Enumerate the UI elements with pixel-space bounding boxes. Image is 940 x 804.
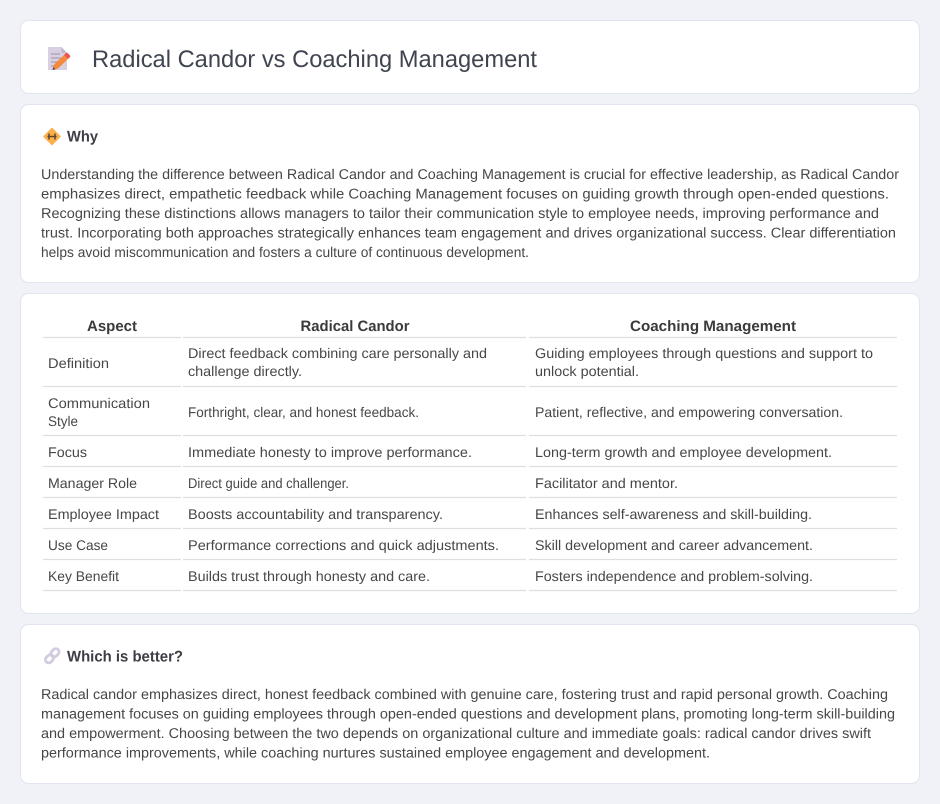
panel: why <box>20 104 920 282</box>
row: key benefit: Key Benefit <box>48 568 119 584</box>
row: manager role: Manager Role <box>48 475 137 491</box>
row: definition: Direct feedback combining care personally and <box>188 345 487 361</box>
row: focus: Immediate honesty to improve performance. <box>188 444 472 460</box>
icon: warning diamond <box>44 128 60 144</box>
row: communication style: Style <box>48 413 78 429</box>
row: employee impact: Employee Impact <box>48 506 159 522</box>
row: employee impact: Enhances self-awareness and skill-building. <box>535 506 812 522</box>
panel: title header <box>20 20 920 94</box>
table header <box>87 318 796 335</box>
row: use case <box>48 537 813 553</box>
table header: Coaching Management <box>630 318 796 335</box>
text block: which is better paragraph: and empowerment. Choosing between the two depends on organizational culture and immediate goals: radical candor drives swift <box>41 726 871 742</box>
text block: which is better paragraph: management focuses on guiding employees through open-ended questions and development plans, promoting long-term skill-building <box>41 706 895 722</box>
text block: why paragraph: Understanding the difference between Radical Candor and Coaching Management is crucial for effective leadership, as Radical Candor <box>41 167 899 183</box>
table header: Radical Candor <box>300 318 410 335</box>
panel: comparison table <box>20 294 920 614</box>
row: focus: Long-term growth and employee development. <box>535 444 832 460</box>
table header: Aspect <box>87 318 137 335</box>
row: definition: Guiding employees through questions and support to <box>535 345 873 361</box>
row: focus <box>48 444 832 460</box>
row: key benefit: Builds trust through honesty and care. <box>188 568 430 584</box>
row: key benefit <box>48 568 813 584</box>
row: use case: Skill development and career advancement. <box>535 537 813 553</box>
title: Radical Candor vs Coaching Management <box>92 46 537 73</box>
text block: why paragraph: Recognizing these distinctions allows managers to tailor their communication style to employee needs, improving performance and <box>41 206 879 222</box>
row: focus: Focus <box>48 444 87 460</box>
row: definition: challenge directly. <box>188 363 302 379</box>
row: use case: Performance corrections and quick adjustments. <box>188 537 499 553</box>
text block: why paragraph <box>41 167 899 261</box>
row: definition: unlock potential. <box>535 363 639 379</box>
heading: why: Why <box>67 128 98 146</box>
text block: which is better paragraph: performance improvements, while coaching nurtures sustained employee engagement and development. <box>41 746 710 762</box>
panel: which is better <box>20 624 920 784</box>
row: definition: Definition <box>48 355 109 371</box>
heading: which is better: Which is better? <box>67 648 183 666</box>
text block: why paragraph: trust. Incorporating both approaches strategically enhances team engagement and drives organizational success. Clear differentiation <box>41 226 896 242</box>
icon: memo with pencil <box>48 47 70 70</box>
text block: which is better paragraph: Radical candor emphasizes direct, honest feedback combined with genuine care, fostering trust and rapid personal growth. Coaching <box>41 687 888 703</box>
row: manager role: Facilitator and mentor. <box>535 475 678 491</box>
row: manager role: Direct guide and challenger. <box>188 475 349 491</box>
row: employee impact <box>48 506 812 522</box>
row: key benefit: Fosters independence and problem-solving. <box>535 568 813 584</box>
icon: link <box>44 647 60 664</box>
row: communication style <box>48 395 843 429</box>
row: communication style: Forthright, clear, and honest feedback. <box>188 404 419 420</box>
text block: why paragraph: helps avoid miscommunication and fosters a culture of continuous development. <box>41 245 529 261</box>
row: communication style: Communication <box>48 395 150 411</box>
row: manager role <box>48 475 678 491</box>
text block: why paragraph: emphasizes direct, empathetic feedback while Coaching Management focuses on guiding growth through open-ended questions. <box>41 186 889 202</box>
row: use case: Use Case <box>48 537 108 553</box>
row: communication style: Patient, reflective, and empowering conversation. <box>535 404 843 420</box>
text block: which is better paragraph <box>41 687 895 762</box>
row: definition <box>48 345 873 379</box>
row: employee impact: Boosts accountability and transparency. <box>188 506 443 522</box>
